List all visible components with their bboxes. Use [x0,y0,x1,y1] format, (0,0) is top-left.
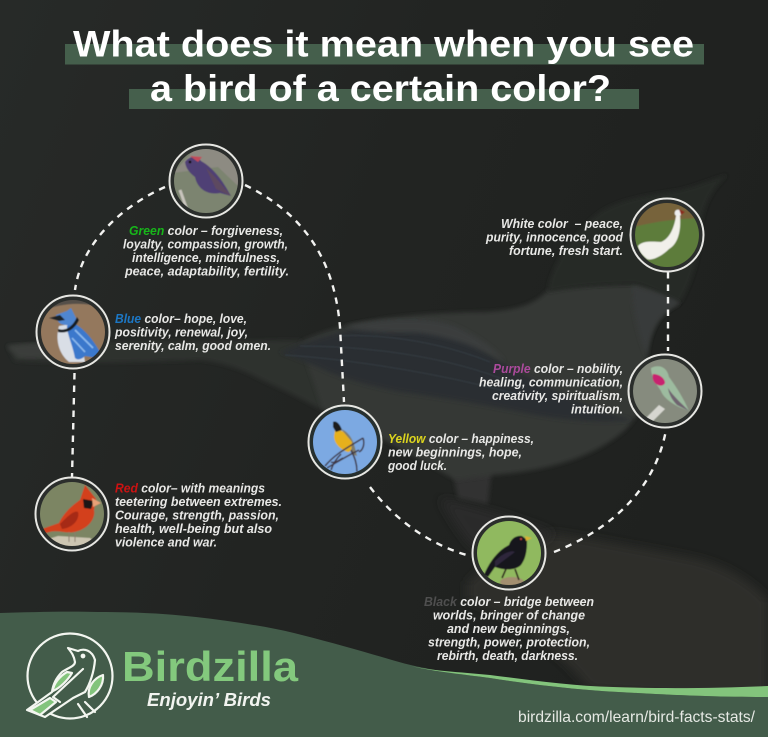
silhouette: leg [452,470,492,504]
connector: green to yellow [245,185,344,402]
text: yellow color: Yellow color – happiness, [388,431,534,446]
photo: cardinal [39,481,105,547]
photo: yellow bird on branch [312,409,378,475]
logo: bird in ring [27,634,112,718]
text: white color: purity, innocence, good [485,230,624,244]
text: black color: and new beginnings, [447,621,570,636]
node: blue bird [36,296,110,368]
text: purple color: Purple color – nobility, [493,361,623,376]
logo ring [28,634,112,718]
text: white color: White color – peace, [501,216,623,231]
node: white bird [630,198,704,272]
text: purple color: creativity, spiritualism, [492,388,623,403]
text: red color: violence and war. [115,534,217,550]
node ring [36,296,110,368]
logo bird wing [53,672,72,691]
title text line 1: What does it mean when you see [73,24,694,64]
title text line 2: a bird of a certain color? [150,68,611,109]
node: black bird [472,516,546,590]
node ring [628,354,702,428]
text: blue color: Blue color– hope, love, [115,311,247,326]
logo bird body outline [27,648,95,717]
text: green color: Green color – forgiveness, [129,223,283,238]
text: green color [123,223,289,278]
silhouette: wing [280,322,632,422]
text: black color: worlds, bringer of change [433,608,585,622]
footer band [0,612,768,737]
text: black color: strength, power, protection, [428,634,590,650]
background bird silhouette [7,175,768,700]
text: purple color [479,361,623,416]
logo tail feathers [30,698,56,715]
node: red bird [36,478,108,550]
logo inner wing stroke [53,669,83,702]
connector: white to purple [667,272,669,351]
silhouette: tail highlight [7,343,100,358]
node ring [472,516,546,590]
title [65,24,704,109]
title highlight bars [65,44,704,109]
silhouette: branch ridge [440,498,553,552]
connector: yellow to black [370,487,470,556]
logo tagline: Enjoyin’ Birds [147,689,271,710]
node: purple bird [628,354,702,428]
text: blue color: serenity, calm, good omen. [115,338,271,353]
text: yellow color: good luck. [387,458,447,473]
text: red color: health, well-being but also [115,521,272,536]
photo: hummingbird [632,358,698,424]
text: white color [485,216,624,258]
node: yellow bird [308,406,382,478]
node ring [630,198,704,272]
text: purple color: intuition. [571,402,623,416]
connector: black to purple [554,430,666,552]
connector: blue to red [72,373,74,477]
text: red color: Red color– with meanings [115,480,265,496]
logo eye [82,655,84,657]
photo: blue jay [40,299,106,365]
text: yellow color [387,431,534,473]
node ring [308,406,382,478]
silhouette: body [300,284,680,480]
photo: blackbird [476,520,542,587]
silhouette: dark head and neck [548,175,727,303]
photo: purple finch on mossy ground [173,148,239,214]
text: black color: Black color – bridge between [424,594,594,609]
text: white color: fortune, fresh start. [509,243,623,258]
text: red color: teetering between extremes. [115,494,282,509]
logo branch [78,702,95,717]
node: green bird [170,144,242,218]
silhouette: tail [7,340,345,410]
text: purple color: healing, communication, [479,374,623,390]
logo wordmark: Birdzilla [122,643,299,690]
text: red color: Courage, strength, passion, [115,508,279,522]
dashed connector paths [72,185,668,556]
text: black color: rebirth, death, darkness. [437,648,578,663]
text: green color: intelligence, mindfulness, [132,250,280,265]
logo leaf [89,675,103,697]
text: blue color [114,311,271,353]
node ring [170,144,242,218]
silhouette: nape highlight [632,286,680,357]
connector: green to blue [75,187,165,290]
silhouette: branch [467,533,768,700]
text: yellow color: new beginnings, hope, [388,444,522,460]
node ring [36,478,108,550]
text: green color: loyalty, compassion, growth, [123,236,288,252]
source url: birdzilla.com/learn/bird-facts-stats/ [518,709,756,726]
text: green color: peace, adaptability, fertility. [124,264,289,278]
silhouette: wing light patch [345,319,505,362]
text: red color [115,480,282,550]
footer light green swoosh [407,665,768,697]
silhouette: wing streaks [285,336,520,395]
photo: whooping crane [634,202,700,268]
text: blue color: positivity, renewal, joy, [114,324,248,340]
text: black color [424,594,594,663]
